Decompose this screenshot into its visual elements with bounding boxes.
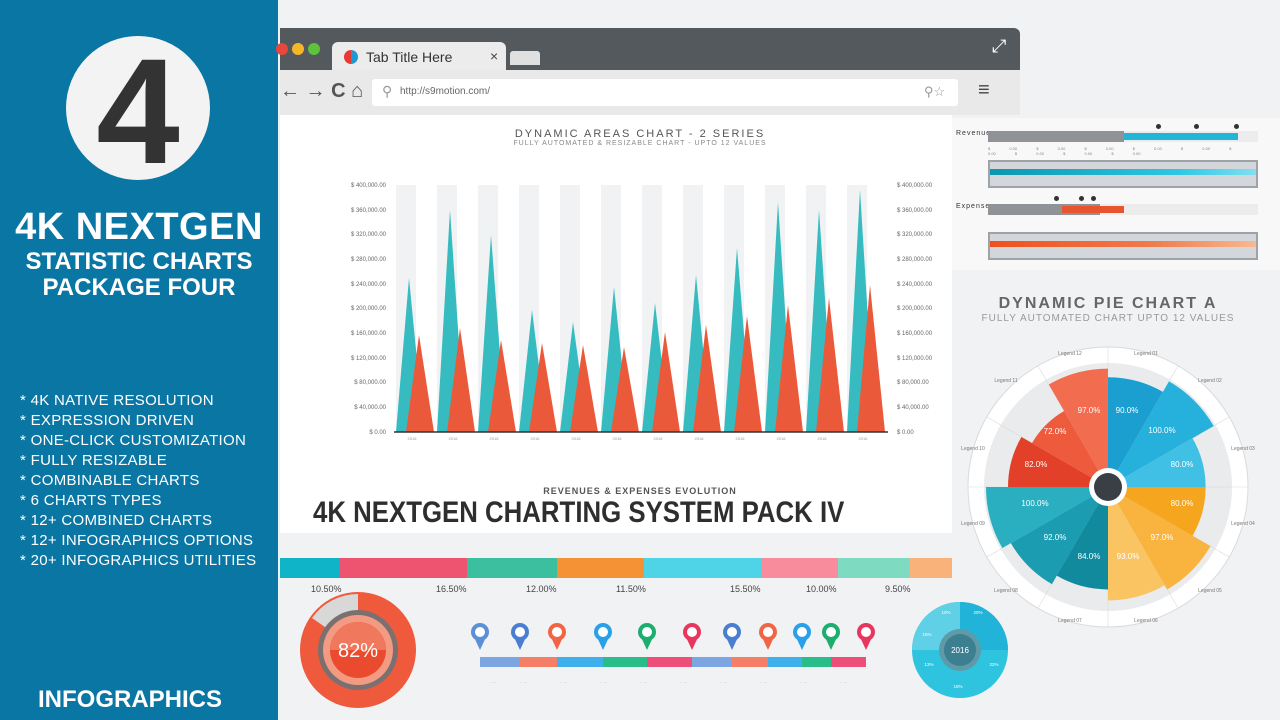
tab: × [490,48,498,64]
area chart: $ 360,000.00 [897,208,933,214]
address bar: ⚲ [382,83,392,99]
area chart: $ 400,000.00 [351,183,387,189]
area chart: $ 200,000.00 [351,306,387,312]
gauge: 82% [300,592,416,708]
percentage labels: 10.00% [806,584,837,594]
address bar: ← → C ⌂ [280,80,363,102]
pie chart: 100.0% [1021,499,1049,508]
panel: left sidebar [0,0,278,720]
area chart: 2016 [818,436,827,441]
area chart: 2016 [449,436,458,441]
pie chart: Legend 07 [1058,618,1082,624]
stacked percentage bar [280,558,952,578]
panel: revenue/expenses bullet bars [952,118,1280,270]
small donut: 2016: 18% [953,684,963,689]
pie chart: 84.0% [1078,552,1100,561]
pins timeline: · · · [640,680,646,685]
feature list: * EXPRESSION DRIVEN [20,412,194,429]
pins timeline [471,623,875,685]
area chart: $ 40,000.00 [354,405,387,411]
pie chart: 97.0% [1078,406,1100,415]
small donut: 2016 [912,602,1008,698]
revenue structure box [988,160,1258,188]
feature list: * 12+ INFOGRAPHICS OPTIONS [20,532,253,549]
pie chart: Legend 04 [1231,521,1255,527]
address bar: ≡ [978,79,990,101]
pie chart: 90.0% [1116,406,1138,415]
chart title [513,128,767,147]
area chart: $ 80,000.00 [354,380,387,386]
expenses structure box [988,232,1258,260]
icon: number 4 circle [66,36,210,180]
pie chart: 100.0% [1148,426,1176,435]
area chart [351,182,933,441]
browser tab bar [280,28,1020,70]
pie chart: Legend 01 [1134,351,1158,357]
tab [332,42,506,72]
pins timeline: · · · [600,680,606,685]
area chart: 2016 [490,436,499,441]
browser tab bar: ⤢ [992,36,1006,56]
pins timeline: · · · [680,680,686,685]
area chart: $ 160,000.00 [897,331,933,337]
area chart: 2016 [736,436,745,441]
address bar: http://s9motion.com/ [400,86,490,97]
pie chart: Legend 03 [1231,446,1255,452]
pins timeline: · · · [720,680,726,685]
pins timeline: · · · [760,680,766,685]
gauge: 82%: 82% [338,640,378,662]
pie chart: 72.0% [1044,427,1066,436]
pins timeline: · · · [800,680,806,685]
area chart: $ 320,000.00 [351,232,387,238]
feature list: * 12+ COMBINED CHARTS [20,512,212,529]
panel: browser window [276,28,1020,533]
percentage labels [311,584,911,594]
expenses bar: Expenses [956,203,995,210]
area chart: $ 280,000.00 [351,257,387,263]
area chart: $ 360,000.00 [351,208,387,214]
small donut: 2016: 20% [973,610,983,615]
pie chart [961,346,1255,628]
pie chart: Legend 11 [994,378,1018,384]
revenue bar: Revenue [956,130,991,137]
heading: 4K NEXTGEN: 4K NEXTGEN [15,206,263,248]
footer label: INFOGRAPHICS [38,686,222,713]
small donut: 2016: 2016 [951,646,969,655]
percentage labels: 12.00% [526,584,557,594]
area chart: 2016 [777,436,786,441]
area chart: $ 80,000.00 [897,380,929,386]
pie chart: Legend 10 [961,446,985,452]
area chart: $ 320,000.00 [897,232,933,238]
area chart: $ 280,000.00 [897,257,933,263]
small donut: 2016: 15% [922,632,932,637]
subheading: PACKAGE FOUR [43,274,235,301]
pins timeline: · · · [490,680,496,685]
feature list [20,392,256,569]
feature list: * FULLY RESIZABLE [20,452,167,469]
pie chart: 97.0% [1151,533,1173,542]
pie chart: 92.0% [1044,533,1066,542]
feature list: * 4K NATIVE RESOLUTION [20,392,214,409]
small donut: 2016: 22% [989,662,999,667]
area chart: $ 0.00 [897,430,914,436]
small donut: 2016: 10% [941,610,951,615]
percentage labels: 10.50% [311,584,342,594]
pie chart: Legend 02 [1198,378,1222,384]
area chart: 2016 [859,436,868,441]
address bar [280,70,1020,115]
pie title [982,295,1234,324]
area chart: $ 120,000.00 [351,356,387,362]
percentage labels: 9.50% [885,584,911,594]
tab: Tab Title Here [366,49,452,65]
content white [280,115,952,533]
pie chart: Legend 09 [961,521,985,527]
feature list: * COMBINABLE CHARTS [20,472,200,489]
area chart: 2016 [695,436,704,441]
area chart: $ 160,000.00 [351,331,387,337]
area chart: 2016 [613,436,622,441]
panel: revenue/expenses bullet bars: $ 0.00 $ 0.00 $ 0.00 $ 0.00 $ 0.00 $ 0.00 $ 0.00 $ 0.00 $ 0.00 [988,146,1231,156]
area chart: $ 240,000.00 [351,282,387,288]
percentage labels: 16.50% [436,584,467,594]
pie chart: Legend 08 [994,588,1018,594]
area chart: $ 200,000.00 [897,306,933,312]
pins timeline: · · · [520,680,526,685]
area chart: 2016 [654,436,663,441]
chart title: FULLY AUTOMATED & RESIZABLE CHART - UPTO 12 VALUES [513,140,767,147]
area chart: 2016 [408,436,417,441]
pie chart: 80.0% [1171,499,1193,508]
feature list: * 20+ INFOGRAPHICS UTILITIES [20,552,256,569]
percentage labels: 11.50% [616,584,646,594]
pie title: FULLY AUTOMATED CHART UPTO 12 VALUES [982,313,1234,324]
area chart: 2016 [531,436,540,441]
pie chart: 93.0% [1117,552,1139,561]
pie title: DYNAMIC PIE CHART A [999,295,1217,312]
subheading: STATISTIC CHARTS [25,248,253,275]
subheading [25,248,253,301]
feature list: * 6 CHARTS TYPES [20,492,162,509]
chart title: DYNAMIC AREAS CHART - 2 SERIES [515,128,765,140]
feature list: * ONE-CLICK CUSTOMIZATION [20,432,246,449]
pins timeline: · · · [560,680,566,685]
area chart: 2016 [572,436,581,441]
pie chart: Legend 06 [1134,618,1158,624]
area chart: $ 120,000.00 [897,356,933,362]
area chart: $ 0.00 [369,430,387,436]
main title: 4K NEXTGEN CHARTING SYSTEM PACK IV [313,496,844,529]
percentage labels: 15.50% [730,584,761,594]
pie chart: 82.0% [1025,460,1047,469]
address bar: ⚲☆ [924,84,945,99]
area chart: $ 400,000.00 [897,183,933,189]
pie chart: 80.0% [1171,460,1193,469]
area chart: $ 240,000.00 [897,282,933,288]
caption: revenues & expenses evolution: REVENUES & EXPENSES EVOLUTION [543,486,737,496]
pins timeline: · · · [840,680,846,685]
pie chart: Legend 12 [1058,351,1082,357]
pie chart: Legend 05 [1198,588,1222,594]
area chart: $ 40,000.00 [897,405,929,411]
small donut: 2016: 13% [924,662,934,667]
